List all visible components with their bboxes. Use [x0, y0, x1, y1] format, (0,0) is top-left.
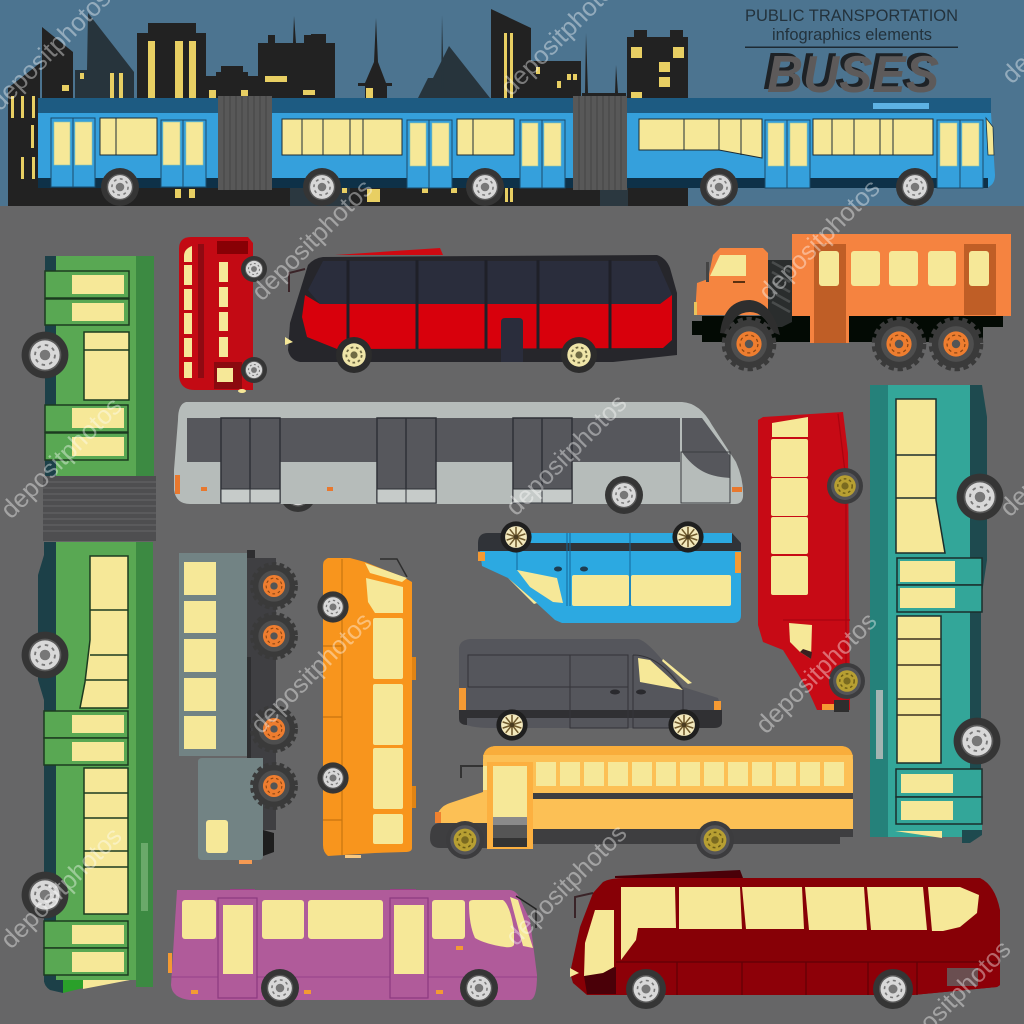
bus: blue articulated city bus	[38, 96, 995, 206]
watermarks: depositphotos	[246, 174, 379, 306]
bus: dark grey van	[459, 639, 722, 741]
bus: dark red tourist coach	[570, 870, 1000, 1009]
watermarks: depositphotos	[500, 819, 633, 951]
accordion joints	[218, 96, 627, 190]
watermarks: depositphotos	[750, 607, 883, 739]
windows	[100, 118, 933, 158]
skyline lit windows	[11, 33, 684, 202]
heading divider	[745, 46, 958, 48]
panel: night city banner	[0, 0, 1024, 206]
watermarks: depositphotos	[500, 389, 633, 521]
title: public transportation: PUBLIC TRANSPORTATION	[745, 7, 958, 25]
bus: yellow school bus	[430, 746, 853, 859]
watermarks: depositphotos	[753, 174, 886, 306]
bus: green articulated top view, front section	[22, 256, 154, 476]
bus: teal articulated top view	[870, 385, 1003, 843]
bus: blue minibus upside down	[478, 521, 741, 623]
bus: grey off-road truck bus top view	[179, 550, 296, 864]
bus: orange off-road truck bus	[692, 234, 1011, 369]
bus: grey airport bus	[174, 402, 743, 514]
heading: buses: BUSES	[767, 46, 939, 104]
bus: red bus top view	[758, 412, 865, 712]
heading: buses: BUSES	[763, 43, 935, 101]
doors	[51, 118, 983, 188]
accordion joint: green bus	[43, 476, 156, 541]
subtitle: infographics elements: infographics elements	[772, 25, 932, 44]
city skyline	[8, 9, 688, 206]
bus: green articulated top view, rear section	[22, 542, 153, 993]
bus: red double decker top view	[179, 237, 267, 393]
bus: black and red coach	[285, 248, 677, 373]
wheels	[101, 168, 934, 206]
bus: orange bus top view	[317, 558, 416, 858]
door panes	[54, 122, 979, 166]
bus: purple city bus	[168, 889, 537, 1007]
watermarks: depositphotos	[245, 607, 378, 739]
